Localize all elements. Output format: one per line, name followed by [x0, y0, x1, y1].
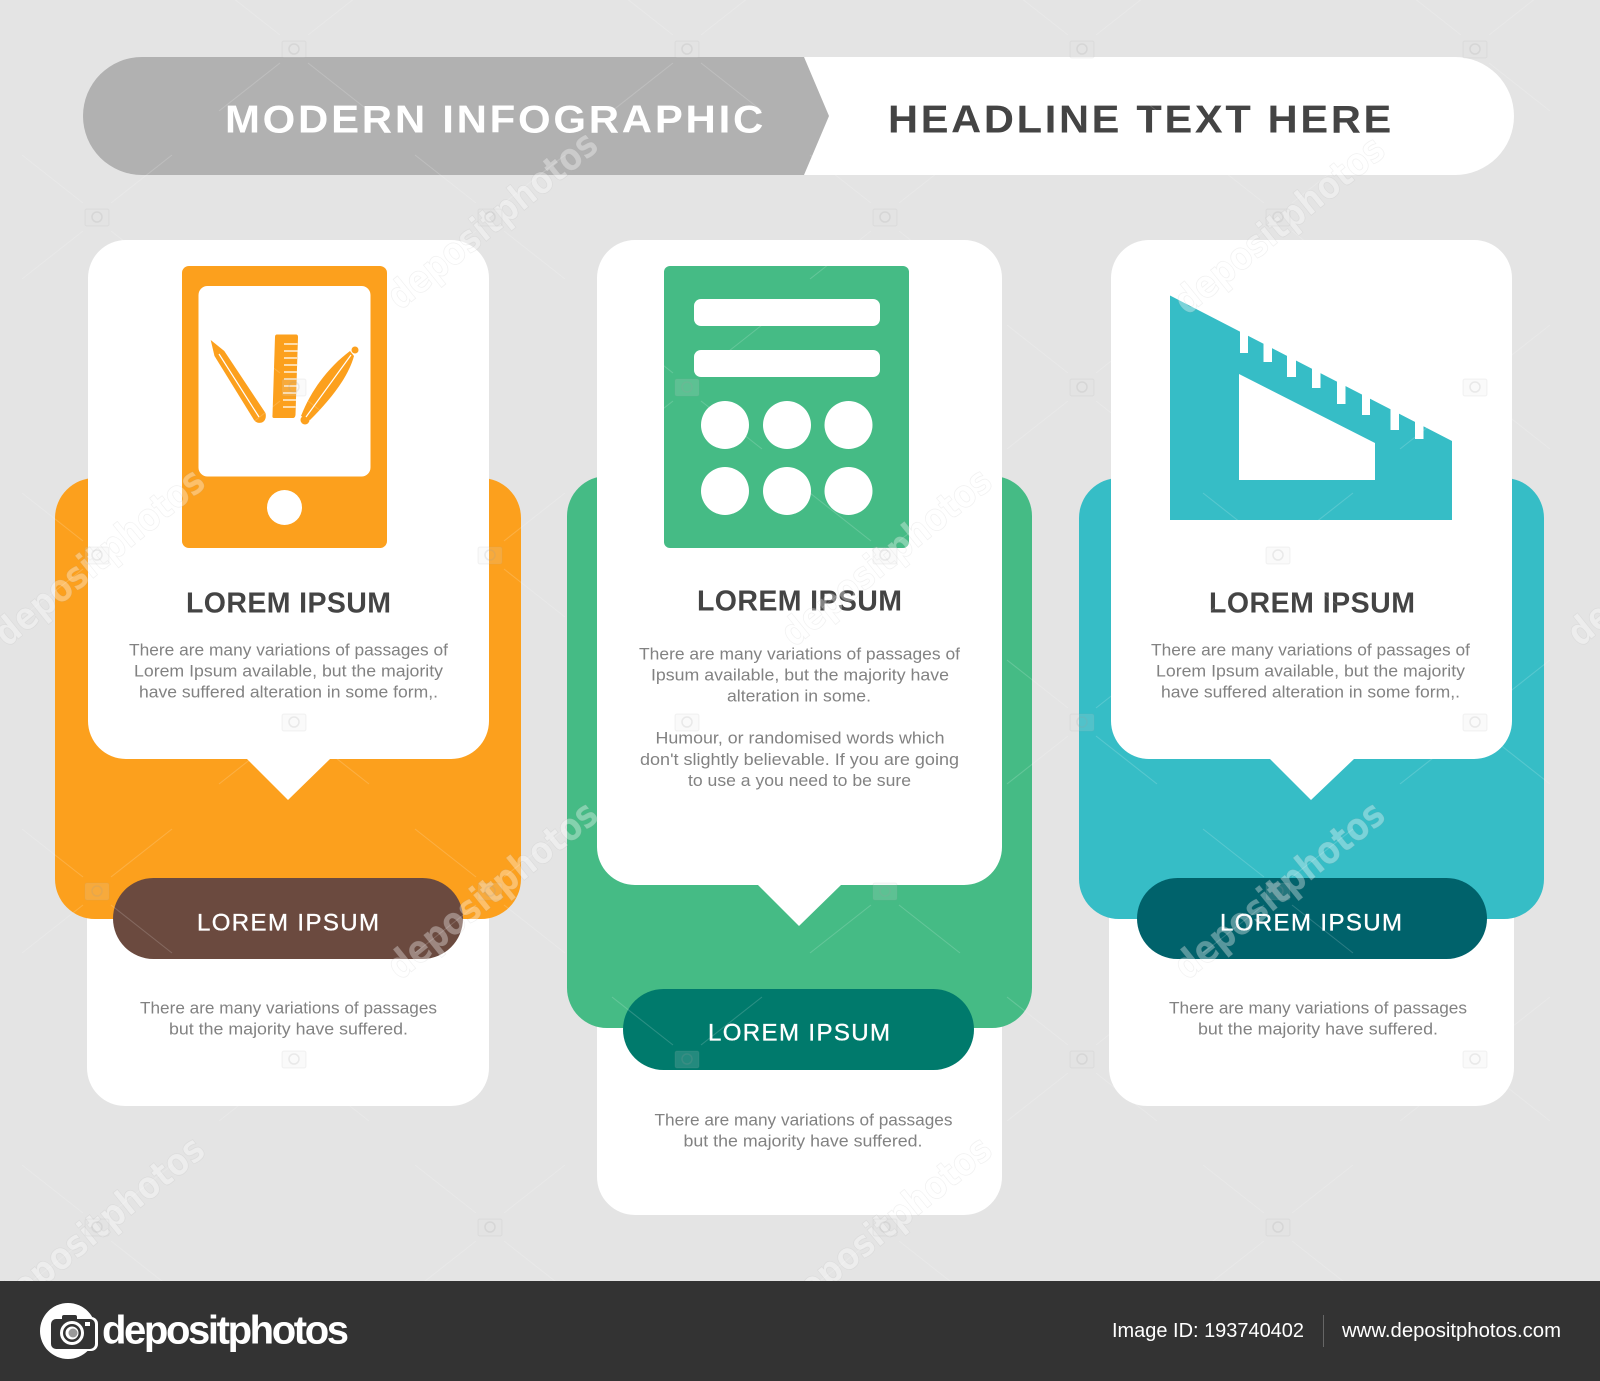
footer divider — [1323, 1315, 1324, 1347]
icon: camera logo — [40, 1303, 98, 1359]
watermark layer: depositphotos — [1165, 791, 1393, 988]
watermark layer: depositphotos — [1165, 126, 1393, 323]
watermark layer: depositphotos — [378, 121, 606, 318]
middle body text: There are many variations of passages of — [639, 646, 960, 664]
image id: Image ID: 193740402 — [1112, 1320, 1304, 1342]
middle pill button: LOREM IPSUM — [708, 1020, 890, 1046]
middle lower text: There are many variations of passages — [654, 1112, 952, 1130]
left lower text — [140, 1000, 437, 1038]
heading: modern infographic: MODERN INFOGRAPHIC — [225, 98, 766, 142]
middle coloured panel — [567, 476, 1032, 1028]
right lower text: There are many variations of passages — [1169, 1000, 1467, 1018]
left card base — [87, 860, 489, 1106]
right body text: Lorem Ipsum available, but the majority — [1156, 662, 1466, 680]
left lower text: but the majority have suffered. — [169, 1020, 408, 1038]
middle body text: alteration in some. — [727, 688, 871, 706]
watermark layer: depositphotos — [378, 791, 606, 988]
middle card base — [597, 970, 1002, 1215]
left pill button — [113, 878, 463, 959]
panel: middle column — [567, 240, 1032, 1215]
left coloured panel — [55, 478, 521, 919]
left body text — [129, 642, 448, 702]
left pill button: LOREM IPSUM — [197, 910, 379, 936]
left body text: There are many variations of passages of — [129, 642, 448, 660]
watermark layer: depositphotos — [772, 458, 1000, 655]
left heading: LOREM IPSUM — [186, 588, 391, 620]
middle body text: to use a you need to be sure — [688, 772, 911, 790]
middle body text — [639, 646, 960, 790]
middle lower text: but the majority have suffered. — [684, 1132, 922, 1150]
right card base — [1109, 860, 1514, 1106]
middle lower text — [654, 1112, 952, 1150]
middle heading: LOREM IPSUM — [697, 586, 902, 618]
right pill button — [1137, 878, 1487, 959]
banner left grey chevron segment — [83, 57, 829, 175]
watermark layer: depositphotos — [772, 1126, 1000, 1323]
left lower text: There are many variations of passages — [140, 1000, 437, 1018]
header banner — [83, 57, 1514, 175]
banner right white segment — [700, 57, 1514, 175]
right body text: have suffered alteration in some form,. — [1161, 684, 1460, 702]
right top speech card — [1111, 240, 1512, 800]
middle pill button — [623, 989, 974, 1070]
panel: right column — [1079, 240, 1544, 1106]
heading: headline text here: HEADLINE TEXT HERE — [888, 98, 1394, 142]
icon: calculator — [664, 266, 909, 548]
panel: left column — [55, 240, 521, 1106]
right heading: LOREM IPSUM — [1209, 588, 1415, 620]
middle body text: Humour, or randomised words which — [656, 730, 944, 748]
left body text: Lorem Ipsum available, but the majority — [134, 662, 444, 680]
right body text: There are many variations of passages of — [1151, 642, 1470, 660]
right pill button: LOREM IPSUM — [1220, 910, 1402, 936]
right lower text: but the majority have suffered. — [1198, 1020, 1438, 1038]
right coloured panel — [1079, 478, 1544, 919]
icon: set square ruler — [1170, 296, 1452, 520]
middle top speech card — [597, 240, 1002, 926]
right body text — [1151, 642, 1470, 702]
left top speech card — [88, 240, 489, 800]
footer bar — [0, 1281, 1600, 1381]
middle body text: Ipsum available, but the majority have — [651, 666, 949, 684]
website url: www.depositphotos.com — [1341, 1320, 1561, 1342]
right lower text — [1169, 1000, 1467, 1038]
icon: tablet with pencil ruler and pen — [182, 266, 387, 548]
logo wordmark: depositphotos — [102, 1308, 349, 1352]
middle body text: don't slightly believable. If you are going — [640, 751, 959, 769]
left body text: have suffered alteration in some form,. — [139, 684, 438, 702]
